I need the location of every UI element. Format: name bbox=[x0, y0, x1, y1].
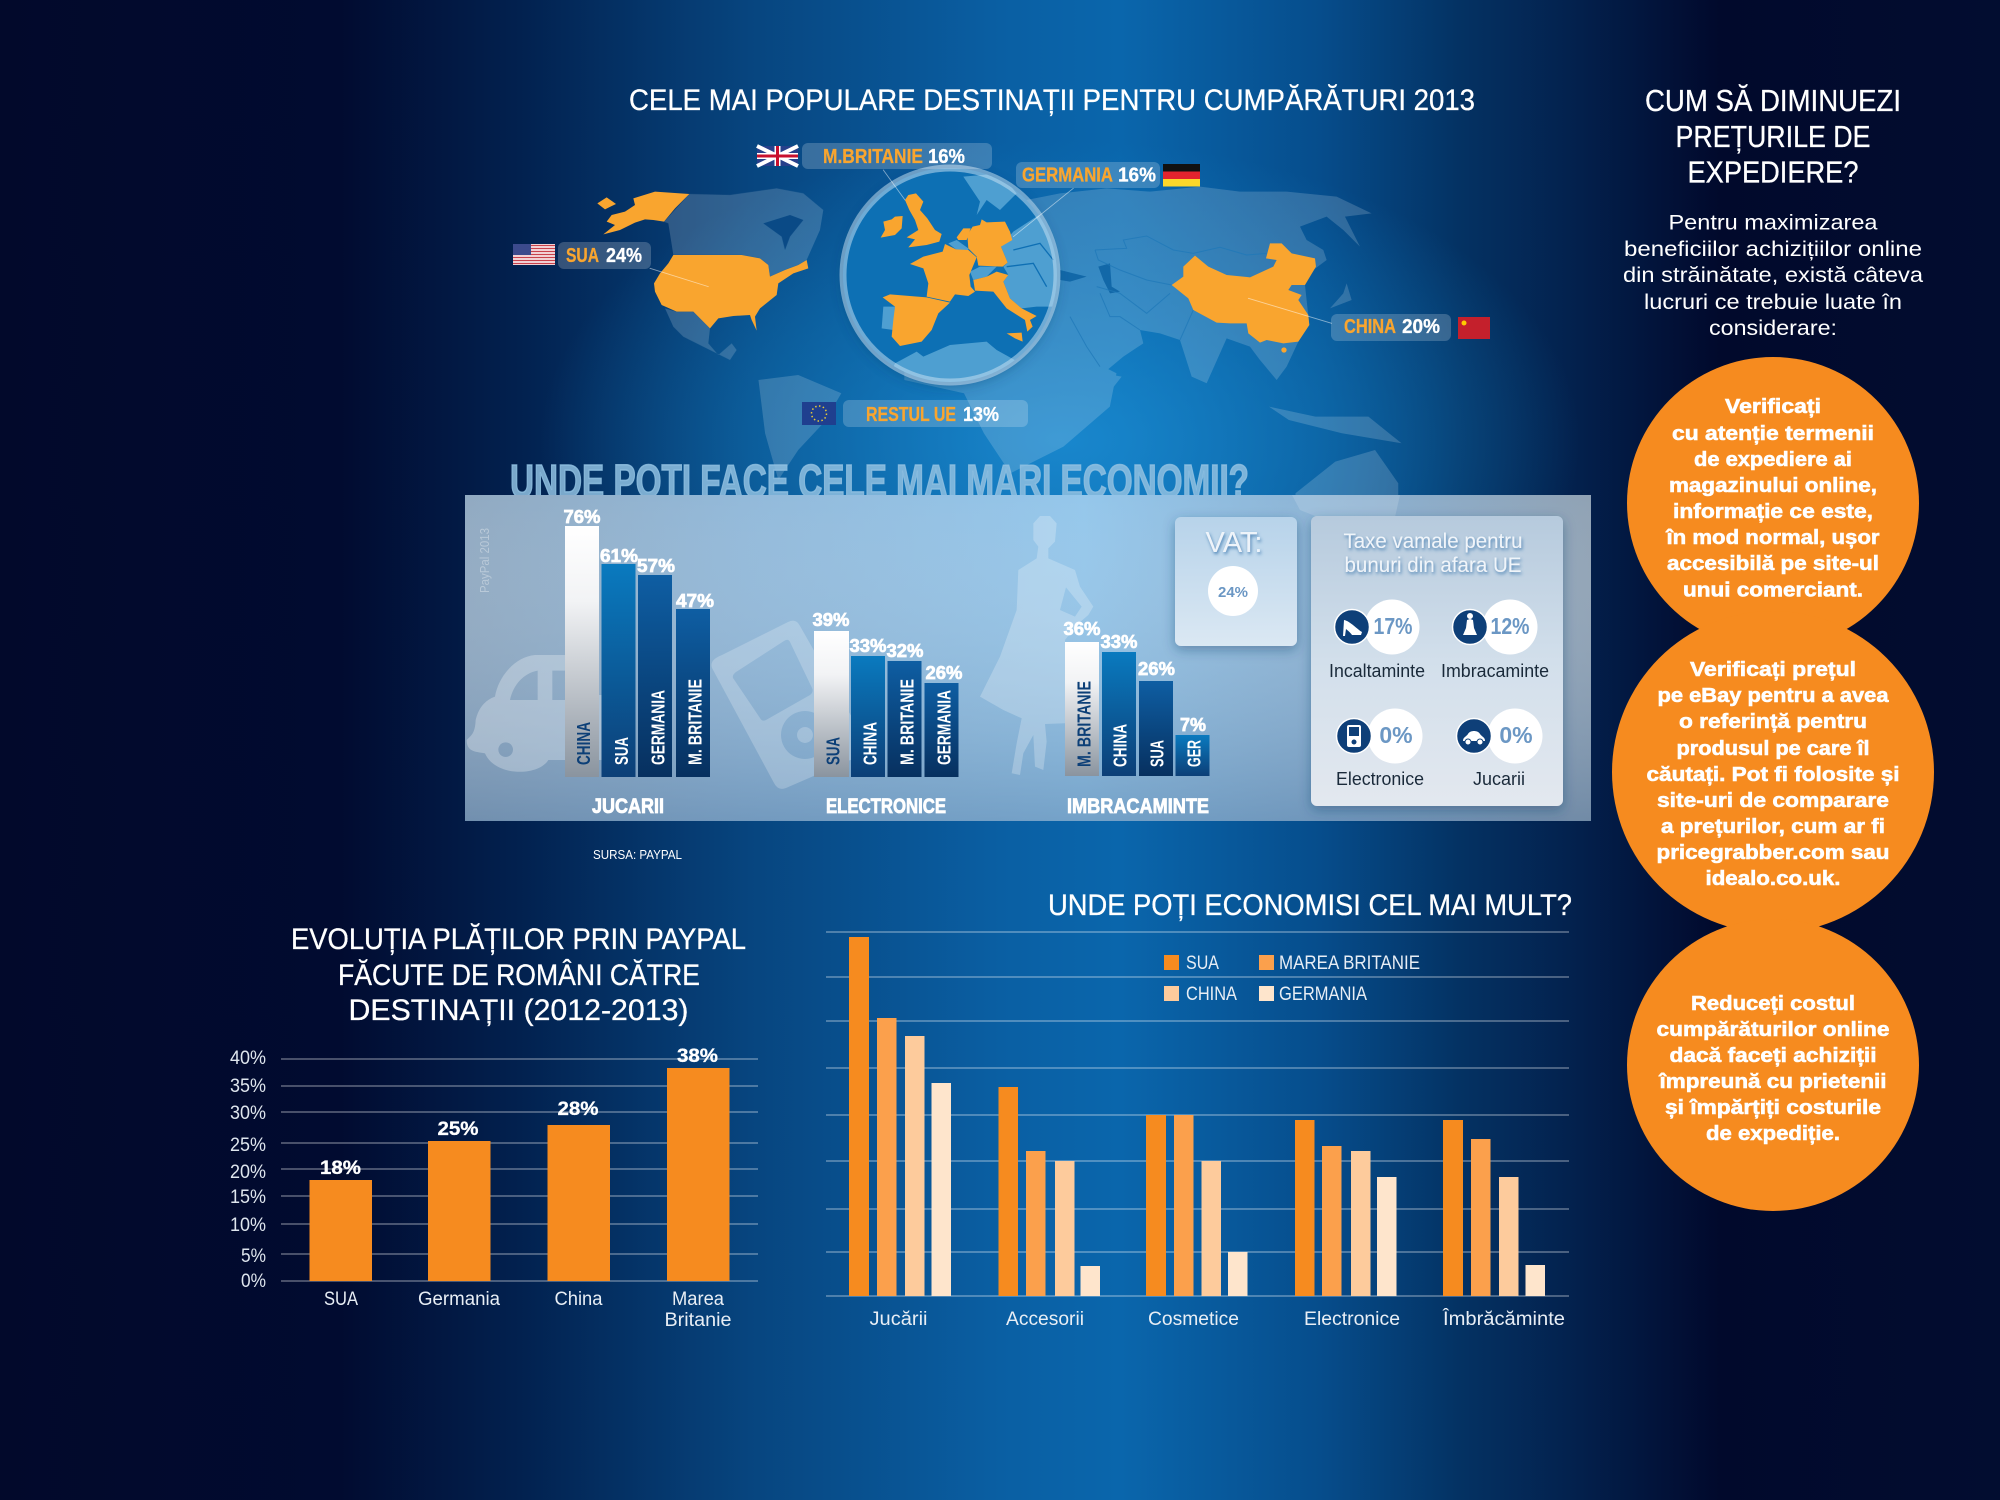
intro paragraph: considerare: bbox=[1709, 317, 1837, 340]
bars: Accesorii bbox=[998, 1087, 1100, 1296]
tip 3 text: Reduceți costul bbox=[1691, 993, 1855, 1015]
tip 1 text: accesibilă pe site-ul bbox=[1667, 553, 1879, 575]
tip 1 text: de expediere ai bbox=[1694, 449, 1852, 471]
panel: shipping tips bbox=[1612, 83, 1934, 1211]
bar group: Jucarii: SUA bbox=[612, 737, 632, 765]
tip 3 text bbox=[1656, 993, 1890, 1145]
faded continents bbox=[664, 187, 1402, 497]
card: VAT: VAT: bbox=[1206, 527, 1262, 559]
tip 1 text: Verificați bbox=[1725, 396, 1821, 418]
tip 2 text: site-uri de comparare bbox=[1657, 790, 1889, 812]
bar group: Imbracaminte: SUA bbox=[1148, 740, 1168, 767]
item: electronics 0%: Electronice bbox=[1336, 769, 1424, 789]
category labels: Îmbrăcăminte bbox=[1442, 1308, 1565, 1330]
silhouette: music player bbox=[711, 621, 867, 789]
tip 2 text: a prețurilor, cum ar fi bbox=[1661, 816, 1885, 838]
label: PayPal 2013: PayPal 2013 bbox=[477, 528, 492, 593]
tips heading: PREȚURILE DE bbox=[1676, 119, 1870, 154]
bar group: Electronice: ELECTRONICE bbox=[826, 795, 946, 818]
item: toys 0%: 0% bbox=[1499, 722, 1533, 748]
bar values: 38% bbox=[677, 1046, 718, 1067]
bars bbox=[310, 1068, 730, 1281]
tips heading: CUM SĂ DIMINUEZI bbox=[1645, 83, 1901, 118]
intro paragraph: beneficiilor achizițiilor online bbox=[1624, 238, 1922, 261]
y axis labels: 10% bbox=[230, 1215, 266, 1236]
legend: MAREA BRITANIE bbox=[1279, 953, 1420, 974]
x axis labels: Marea bbox=[672, 1289, 724, 1310]
panel: savings by category bbox=[465, 495, 1591, 821]
x axis labels: China bbox=[554, 1289, 603, 1310]
card heading bbox=[1344, 530, 1522, 577]
bar group: Electronice: 32% bbox=[886, 641, 924, 661]
bar group: Imbracaminte: 7% bbox=[1180, 715, 1206, 735]
tip 3 text: împreună cu prietenii bbox=[1658, 1071, 1886, 1093]
bar group: Jucarii: 47% bbox=[676, 591, 714, 611]
item: clothing 12%: 12% bbox=[1490, 613, 1530, 639]
callout: China: CHINA bbox=[1344, 316, 1396, 338]
bars: Îmbrăcăminte bbox=[1443, 1120, 1545, 1296]
y axis labels: 30% bbox=[230, 1103, 266, 1124]
bars: Jucării bbox=[849, 937, 951, 1296]
legend: GERMANIA bbox=[1279, 984, 1367, 1005]
x axis labels: Britanie bbox=[664, 1310, 732, 1331]
callout: SUA bbox=[513, 242, 651, 269]
chart heading: FĂCUTE DE ROMÂNI CĂTRE bbox=[338, 959, 700, 992]
tip 1 text: magazinului online, bbox=[1669, 475, 1877, 497]
item: toys 0%: Jucarii bbox=[1473, 769, 1525, 789]
bars: Cosmetice bbox=[1146, 1115, 1248, 1296]
bar group: Jucarii: 76% bbox=[564, 507, 600, 527]
intro paragraph bbox=[1623, 212, 1923, 340]
source note: SURSA: PAYPAL bbox=[593, 847, 682, 862]
item: footwear 17% bbox=[1329, 600, 1425, 681]
bar group: Jucarii: CHINA bbox=[574, 722, 594, 765]
bar group: Imbracaminte: GER bbox=[1184, 740, 1204, 767]
callout: China: 20% bbox=[1402, 316, 1440, 338]
legend bbox=[1164, 953, 1420, 1005]
legend: CHINA bbox=[1186, 984, 1237, 1005]
world map bbox=[597, 168, 1402, 497]
y axis labels: 40% bbox=[230, 1048, 266, 1069]
bars: Electronice bbox=[1295, 1120, 1396, 1296]
bar values: 25% bbox=[438, 1119, 479, 1140]
chart heading: UNDE POȚI ECONOMISI CEL MAI MULT? bbox=[1048, 889, 1572, 922]
tip 2 text: idealo.co.uk. bbox=[1706, 868, 1840, 890]
tip 1 text: informație ce este, bbox=[1673, 501, 1873, 523]
item: toys 0% bbox=[1456, 708, 1542, 789]
bar values: 18% bbox=[320, 1158, 361, 1179]
bar group: Imbracaminte: M. BRITANIE bbox=[1074, 681, 1094, 767]
category labels bbox=[870, 1308, 1565, 1330]
y axis labels: 35% bbox=[230, 1076, 266, 1097]
callout: China bbox=[1331, 314, 1490, 341]
bar group: Electronice: 39% bbox=[812, 610, 850, 630]
icon: China flag bbox=[1458, 317, 1490, 339]
bar group: Imbracaminte: 36% bbox=[1064, 619, 1100, 639]
callout: Restul UE: 13% bbox=[963, 404, 999, 426]
faded Australia overlap bbox=[1292, 495, 1400, 522]
tip 3 text: cumpărăturilor online bbox=[1656, 1019, 1890, 1041]
callout: M.Britanie: M.BRITANIE bbox=[823, 146, 923, 168]
tip 1 text bbox=[1665, 396, 1880, 602]
bar group: Imbracaminte bbox=[1064, 619, 1210, 818]
bar group: Electronice: 26% bbox=[926, 663, 962, 683]
x axis labels: SUA bbox=[324, 1289, 358, 1310]
callout: M.Britanie bbox=[757, 143, 992, 169]
icon: US flag bbox=[513, 244, 555, 265]
bar group: Electronice: 33% bbox=[850, 636, 886, 656]
y axis labels: 20% bbox=[230, 1162, 266, 1183]
highlighted countries: China bbox=[1172, 243, 1332, 353]
panel: savings grouped chart bbox=[826, 889, 1572, 1330]
tips heading: EXPEDIERE? bbox=[1688, 154, 1858, 190]
tip 1 text: unui comerciant. bbox=[1683, 580, 1863, 602]
tip 1 text: în mod normal, ușor bbox=[1665, 527, 1880, 549]
highlighted countries: Europe bbox=[881, 170, 1073, 346]
callout: Germania: GERMANIA bbox=[1022, 164, 1113, 186]
bar group: Jucarii: 57% bbox=[637, 556, 675, 576]
tip 2 text: pricegrabber.com sau bbox=[1656, 842, 1890, 864]
card: VAT: 24% bbox=[1218, 584, 1248, 601]
tip 1 text: cu atenție termenii bbox=[1672, 423, 1874, 445]
bar group: Imbracaminte: IMBRACAMINTE bbox=[1067, 795, 1209, 818]
legend: SUA bbox=[1186, 953, 1219, 974]
item: electronics 0% bbox=[1336, 708, 1424, 789]
x axis labels bbox=[324, 1289, 732, 1331]
category labels: Cosmetice bbox=[1148, 1309, 1239, 1330]
lens land bbox=[882, 174, 1057, 382]
chart heading: DESTINAȚII (2012-2013) bbox=[348, 994, 688, 1027]
bar group: Imbracaminte: 33% bbox=[1100, 632, 1138, 652]
item: footwear 17%: Incaltaminte bbox=[1329, 661, 1425, 681]
x axis labels: Germania bbox=[418, 1289, 500, 1310]
callout: M.Britanie: 16% bbox=[928, 146, 965, 168]
callout: Restul UE bbox=[802, 400, 1028, 427]
bar group: Jucarii bbox=[564, 507, 714, 818]
callout: SUA: SUA bbox=[566, 245, 599, 267]
bar group: Jucarii: JUCARII bbox=[592, 795, 664, 818]
bar group: Electronice: SUA bbox=[824, 737, 844, 765]
tip 2 text: Verificați prețul bbox=[1690, 659, 1856, 681]
y axis labels: 15% bbox=[230, 1187, 266, 1208]
icon: EU flag bbox=[802, 402, 836, 425]
category labels: Jucării bbox=[870, 1309, 928, 1330]
panel: PayPal payments chart bbox=[230, 923, 758, 1331]
y axis labels: 25% bbox=[230, 1135, 266, 1156]
bar group: Imbracaminte: 26% bbox=[1138, 659, 1175, 679]
bar group: Jucarii: M. BRITANIE bbox=[686, 679, 706, 765]
silhouette: woman bbox=[980, 516, 1093, 775]
callout: SUA: 24% bbox=[606, 245, 642, 267]
intro paragraph: lucruri ce trebuie luate în bbox=[1644, 291, 1902, 314]
bar group: Imbracaminte: CHINA bbox=[1110, 724, 1130, 767]
tip 3 text: dacă faceți achiziții bbox=[1670, 1045, 1876, 1067]
bar group: Electronice bbox=[812, 610, 962, 818]
title: popular destinations: CELE MAI POPULARE DESTINAȚII PENTRU CUMPĂRĂTURI 2013 bbox=[629, 84, 1475, 117]
tips heading bbox=[1645, 83, 1901, 190]
callout: Germania bbox=[1016, 162, 1200, 188]
callout: Restul UE: RESTUL UE bbox=[866, 404, 956, 426]
highlighted countries: USA bbox=[597, 192, 808, 331]
bar group: Electronice: GERMANIA bbox=[934, 690, 954, 765]
tip 2 text: pe eBay pentru a avea bbox=[1658, 685, 1889, 707]
y axis labels bbox=[230, 1048, 266, 1292]
category labels: Electronice bbox=[1304, 1309, 1400, 1330]
item: electronics 0%: 0% bbox=[1379, 722, 1413, 748]
bar group: Jucarii: 61% bbox=[600, 546, 638, 566]
heading: biggest savings: UNDE POTI FACE CELE MAI MARI ECONOMII? bbox=[510, 455, 1249, 507]
tip 3 text: de expediție. bbox=[1706, 1123, 1840, 1145]
card heading: Taxe vamale pentru bbox=[1344, 530, 1522, 553]
tip 2 text bbox=[1646, 659, 1900, 890]
icon: German flag bbox=[1163, 164, 1200, 186]
callout: Germania: 16% bbox=[1118, 164, 1156, 186]
tip 3 text: și împărțiți costurile bbox=[1665, 1097, 1881, 1119]
tip 2 text: o referință pentru bbox=[1679, 711, 1867, 733]
intro paragraph: din străinătate, există câteva bbox=[1623, 264, 1923, 287]
item: clothing 12%: Imbracaminte bbox=[1441, 661, 1549, 681]
background glow bbox=[540, 140, 1580, 740]
item: footwear 17%: 17% bbox=[1374, 613, 1412, 639]
y axis labels: 0% bbox=[241, 1271, 266, 1292]
bar values bbox=[320, 1046, 718, 1179]
item: clothing 12% bbox=[1441, 600, 1549, 681]
intro paragraph: Pentru maximizarea bbox=[1668, 212, 1878, 234]
card heading: bunuri din afara UE bbox=[1344, 554, 1522, 577]
inland water and borders bbox=[763, 215, 1267, 367]
bar group: Jucarii: GERMANIA bbox=[648, 690, 668, 765]
bar group: Electronice: M. BRITANIE bbox=[898, 679, 918, 765]
bar group: Electronice: CHINA bbox=[860, 722, 880, 765]
category labels: Accesorii bbox=[1006, 1309, 1084, 1330]
chart heading: EVOLUȚIA PLĂȚILOR PRIN PAYPAL bbox=[291, 923, 746, 956]
card: VAT bbox=[1175, 517, 1297, 646]
y axis labels: 5% bbox=[241, 1246, 266, 1267]
bar values: 28% bbox=[558, 1099, 599, 1120]
tip 2 text: căutați. Pot fi folosite și bbox=[1646, 764, 1900, 786]
Europe lens circle bbox=[843, 168, 1070, 390]
card: customs taxes bbox=[1311, 516, 1563, 806]
orange circles bbox=[1612, 357, 1934, 1211]
icon: UK flag bbox=[757, 146, 798, 166]
tip 2 text: produsul pe care îl bbox=[1676, 738, 1870, 760]
chart heading bbox=[291, 923, 746, 1027]
silhouette: car bbox=[467, 655, 602, 772]
